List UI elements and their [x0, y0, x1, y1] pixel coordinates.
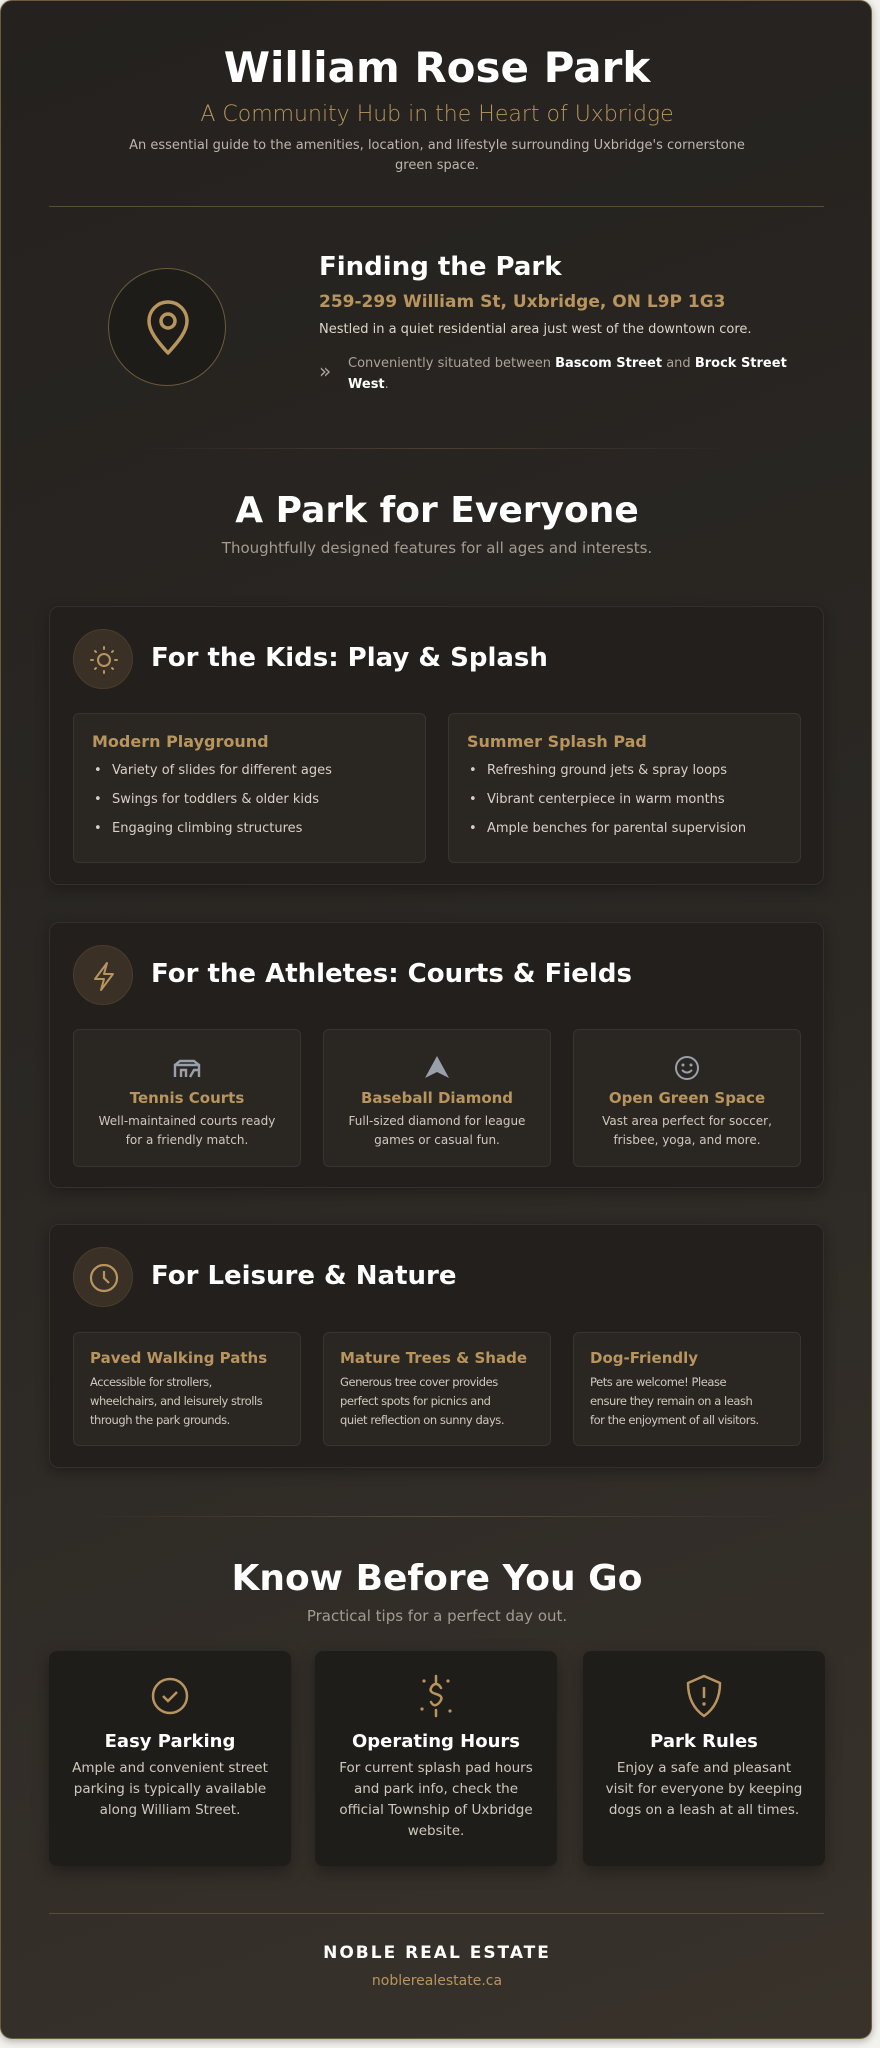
card: playground: Variety of slides for different ages [112, 763, 332, 778]
card: tennis: for a friendly match. [126, 1133, 248, 1147]
panel: kids [49, 606, 824, 885]
card: baseball [323, 1029, 551, 1167]
card: trees: Generous tree cover provides [340, 1375, 498, 1389]
section heading: A Park for Everyone: A Park for Everyone [235, 490, 639, 531]
section heading: Know Before You Go: Know Before You Go [232, 1558, 642, 1599]
card: paths: Accessible for strollers, [90, 1375, 212, 1389]
card: trees: perfect spots for picnics and [340, 1394, 491, 1408]
card: splash pad: Summer Splash Pad [467, 732, 647, 751]
location text: Finding the Park [319, 252, 562, 282]
card: green space [573, 1029, 801, 1167]
card: baseball: games or casual fun. [374, 1133, 500, 1147]
card: paths: through the park grounds. [90, 1413, 230, 1427]
icon: clock [73, 1247, 133, 1307]
tip: rules: Park Rules [650, 1731, 758, 1752]
card: dogs: ensure they remain on a leash [590, 1394, 752, 1408]
tip: hours [315, 1651, 557, 1866]
card: baseball: Full-sized diamond for league [349, 1114, 525, 1128]
card: trees [323, 1332, 551, 1446]
icon: sun [73, 629, 133, 689]
location text [319, 252, 787, 392]
location text: 259-299 William St, Uxbridge, ON L9P 1G3 [319, 292, 726, 312]
card: playground: Modern Playground [92, 732, 269, 751]
footer: NOBLE REAL ESTATE [323, 1943, 551, 1963]
tip: parking [49, 1651, 291, 1866]
location text: Conveniently situated between Bascom Street and Brock Street West. [348, 356, 787, 392]
card: trees: quiet reflection on sunny days. [340, 1413, 504, 1427]
main card: noblerealestate.ca [372, 1973, 502, 1989]
card: paths: wheelchairs, and leisurely strolls [90, 1394, 262, 1408]
title: William Rose Park [224, 43, 650, 92]
icon: location pin [108, 268, 226, 386]
tip: rules: Enjoy a safe and pleasant visit for everyone by keeping dogs on a leash at all times. [606, 1760, 802, 1818]
card: dogs: Dog-Friendly [590, 1349, 698, 1367]
heading: For the Kids: Play & Splash [151, 643, 548, 673]
card: tennis [73, 1029, 301, 1167]
card: splash pad: Refreshing ground jets & spray loops [487, 763, 727, 778]
panel: athletes: For the Athletes: Courts & Fields [151, 959, 632, 989]
intro text: An essential guide to the amenities, location, and lifestyle surrounding Uxbridge's cornerstone green space. [129, 138, 745, 173]
main card: Thoughtfully designed features for all ages and interests. [222, 539, 652, 557]
card: paths [73, 1332, 301, 1446]
card: playground: Engaging climbing structures [112, 821, 302, 836]
card: trees: Mature Trees & Shade [340, 1349, 527, 1367]
card: tennis: Tennis Courts [130, 1089, 244, 1107]
card: playground: Swings for toddlers & older kids [112, 792, 319, 807]
card: splash pad [448, 713, 801, 863]
tip: hours: Operating Hours [352, 1731, 520, 1752]
tip: parking: Easy Parking [105, 1731, 235, 1752]
card: paths: Paved Walking Paths [90, 1349, 267, 1367]
tip: parking: Ample and convenient street parking is typically available along William Street. [72, 1760, 268, 1818]
card: tennis: Well-maintained courts ready [99, 1114, 275, 1128]
subtitle: A Community Hub in the Heart of Uxbridge [200, 102, 674, 127]
tip: hours: For current splash pad hours and park info, check the official Township of Uxbridge website. [339, 1760, 533, 1839]
card: dogs: for the enjoyment of all visitors. [590, 1413, 759, 1427]
card: splash pad: Vibrant centerpiece in warm months [487, 792, 725, 807]
location text: » [319, 359, 331, 383]
card: dogs: Pets are welcome! Please [590, 1375, 726, 1389]
panel: leisure: For Leisure & Nature [151, 1261, 456, 1291]
card: green space: frisbee, yoga, and more. [613, 1133, 761, 1147]
tip: rules [583, 1651, 825, 1866]
card: green space: Vast area perfect for soccer, [602, 1114, 772, 1128]
card: dogs [573, 1332, 801, 1446]
main card: Practical tips for a perfect day out. [307, 1607, 567, 1625]
card: baseball: Baseball Diamond [361, 1089, 513, 1107]
card: green space: Open Green Space [609, 1089, 765, 1107]
panel: leisure [49, 1224, 824, 1468]
card: splash pad: Ample benches for parental supervision [487, 821, 746, 836]
location text: Nestled in a quiet residential area just west of the downtown core. [319, 322, 752, 337]
card: playground [73, 713, 426, 863]
panel: athletes [49, 922, 824, 1188]
icon: bolt [73, 945, 133, 1005]
